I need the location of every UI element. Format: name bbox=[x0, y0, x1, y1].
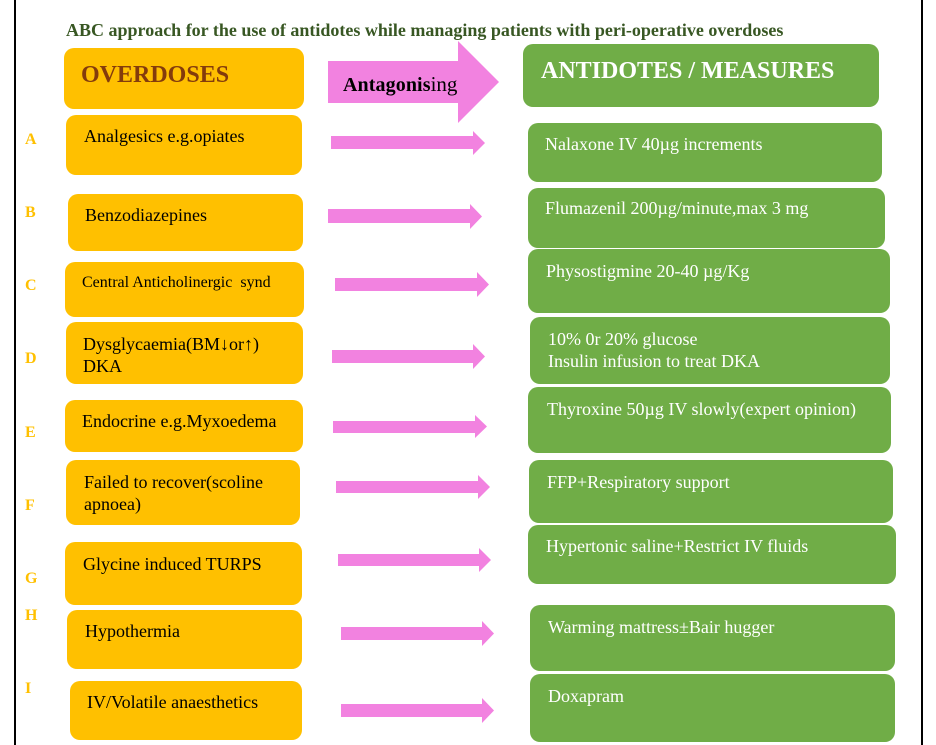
title: ABC approach for the use of antidotes while managing patients with peri-operative overdoses bbox=[66, 20, 783, 40]
overdose G bbox=[65, 542, 302, 605]
antidote D bbox=[530, 317, 890, 384]
arrow D bbox=[332, 344, 485, 369]
heading: overdoses bbox=[64, 48, 304, 109]
antidote H bbox=[530, 605, 895, 671]
overdose D: DKA bbox=[83, 356, 122, 376]
antidote B bbox=[528, 188, 885, 248]
overdose C bbox=[65, 262, 304, 317]
overdose B bbox=[68, 194, 303, 251]
row label D: D bbox=[25, 350, 37, 367]
antidote E: Thyroxine 50µg IV slowly(expert opinion) bbox=[547, 399, 856, 419]
overdose F: Failed to recover(scoline bbox=[84, 472, 263, 492]
arrow F bbox=[336, 475, 490, 499]
row label C: C bbox=[25, 277, 37, 294]
row label G: G bbox=[25, 570, 37, 587]
antidote A: Nalaxone IV 40µg increments bbox=[545, 134, 762, 154]
overdose G: Glycine induced TURPS bbox=[83, 554, 262, 574]
antidote G bbox=[528, 525, 896, 584]
row label F: F bbox=[25, 497, 35, 514]
overdose H: Hypothermia bbox=[85, 621, 180, 641]
antidote D: Insulin infusion to treat DKA bbox=[548, 351, 760, 371]
antidote B: Flumazenil 200µg/minute,max 3 mg bbox=[545, 198, 808, 218]
row label B: B bbox=[25, 204, 36, 221]
arrow B bbox=[328, 204, 482, 229]
overdose C: Central Anticholinergic synd bbox=[82, 274, 271, 291]
antidote F: FFP+Respiratory support bbox=[547, 472, 730, 492]
antidote I: Doxapram bbox=[548, 686, 624, 706]
overdose F: apnoea) bbox=[84, 494, 141, 514]
antidote D: 10% 0r 20% glucose bbox=[548, 329, 697, 349]
overdose E bbox=[65, 400, 303, 452]
antidote G: Hypertonic saline+Restrict IV fluids bbox=[546, 536, 808, 556]
antidote E bbox=[528, 387, 891, 453]
overdose H bbox=[67, 610, 302, 669]
antidote A bbox=[528, 123, 882, 182]
row label I: I bbox=[25, 680, 31, 697]
overdose F bbox=[66, 460, 300, 525]
overdose E: Endocrine e.g.Myxoedema bbox=[82, 411, 276, 431]
antidote H: Warming mattress±Bair hugger bbox=[548, 617, 774, 637]
antidote F bbox=[529, 460, 893, 523]
overdose D bbox=[66, 322, 303, 384]
arrow A bbox=[331, 131, 485, 155]
arrow: antagonising bbox=[328, 41, 499, 123]
antidote C bbox=[528, 249, 890, 313]
overdose A: Analgesics e.g.opiates bbox=[84, 126, 244, 146]
overdose D: Dysglycaemia(BM↓or↑) bbox=[83, 334, 259, 354]
arrow H bbox=[341, 621, 494, 646]
arrow E bbox=[333, 415, 487, 438]
antidote C: Physostigmine 20-40 µg/Kg bbox=[546, 261, 749, 281]
row label H: H bbox=[25, 607, 37, 624]
overdose A bbox=[66, 115, 302, 175]
heading: overdoses: OVERDOSES bbox=[81, 62, 229, 88]
row label E: E bbox=[25, 424, 36, 441]
overdose B: Benzodiazepines bbox=[85, 205, 207, 225]
arrow G bbox=[338, 548, 491, 572]
heading: antidotes: ANTIDOTES / MEASURES bbox=[541, 58, 834, 84]
overdose I: IV/Volatile anaesthetics bbox=[87, 692, 258, 712]
arrow C bbox=[335, 272, 489, 297]
heading: antidotes bbox=[523, 44, 879, 107]
row label A: A bbox=[25, 131, 37, 148]
arrow I bbox=[341, 698, 494, 723]
arrow label: Antagonising bbox=[343, 72, 457, 96]
overdose I bbox=[70, 681, 302, 740]
antidote I bbox=[530, 674, 895, 742]
